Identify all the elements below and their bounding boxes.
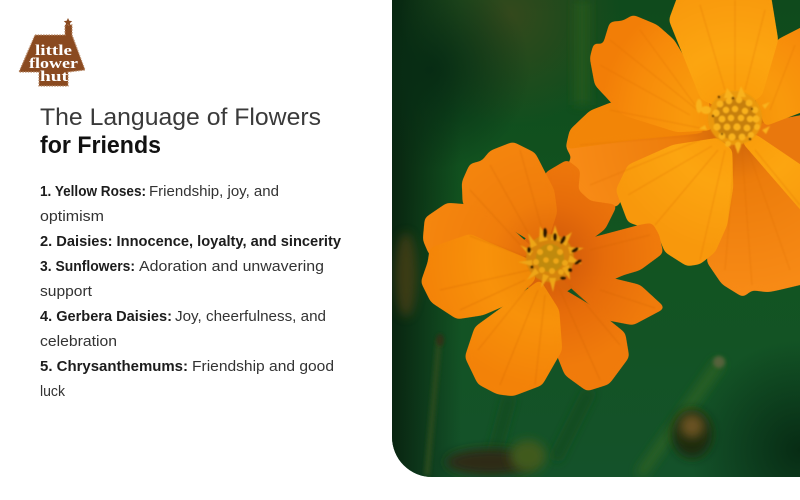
item 5: chrysanthemums (40, 359, 334, 400)
petal: upper left (590, 15, 712, 132)
item 3: sunflowers (40, 259, 324, 300)
item 1: yellow roses: Friendship, joy, and (149, 184, 279, 200)
petal: top right (546, 161, 616, 242)
petal: bottom right (707, 140, 800, 297)
item 3: sunflowers: 3. Sunflowers: (40, 259, 135, 275)
title (40, 104, 321, 159)
flower list (40, 184, 341, 400)
item 5: chrysanthemums: luck (40, 384, 66, 400)
petal: left lower (421, 234, 535, 319)
logo wordmark (29, 43, 78, 85)
item 3: sunflowers: Adoration and unwavering (139, 259, 324, 275)
blurred stems and buds (427, 334, 725, 475)
large flower (566, 0, 800, 297)
small flower (421, 142, 665, 396)
petal: bottom right (550, 291, 629, 390)
petal: top (462, 142, 557, 250)
petal: right upper (756, 28, 800, 125)
petal: right (580, 224, 662, 279)
item 1: yellow roses: optimism (40, 209, 104, 225)
photo: orange cosmos flowers (392, 0, 800, 477)
flower centre (518, 225, 584, 292)
title: for Friends (40, 132, 161, 159)
petal: top (669, 0, 778, 115)
item 2: daisies: 2. Daisies: Innocence, loyalty, and sincerity (40, 234, 341, 250)
petal: front lower (616, 138, 733, 266)
item 4: gerbera daisies: Joy, cheerfulness, and (175, 309, 326, 325)
blurred green background (392, 0, 800, 477)
logo wordmark: flower (29, 56, 78, 72)
petal veins (626, 11, 800, 220)
petal: right lower front (744, 135, 800, 209)
item 4: gerbera daisies: celebration (40, 334, 117, 350)
icon: house shape with chimney (19, 18, 85, 86)
flower centre (696, 86, 770, 154)
petal veins (481, 240, 585, 302)
item 1: yellow roses: 1. Yellow Roses: (40, 184, 146, 200)
item 5: chrysanthemums: 5. Chrysanthemums: (40, 359, 188, 375)
logo wordmark: little (35, 43, 72, 59)
petal: upper left (423, 203, 530, 256)
item 3: sunflowers: support (40, 284, 92, 300)
item 1: yellow roses (40, 184, 279, 225)
item 4: gerbera daisies (40, 309, 326, 350)
item 4: gerbera daisies: 4. Gerbera Daisies: (40, 309, 172, 325)
logo: little flower hut (19, 18, 85, 86)
petal: base fill behind centre (709, 100, 764, 152)
logo wordmark: hut (40, 69, 68, 85)
petal: bottom left (465, 280, 562, 396)
petal: right lower back (756, 115, 800, 164)
title: The Language of Flowers (40, 104, 321, 131)
petal: left upper lobe (566, 102, 712, 149)
item 5: chrysanthemums: Friendship and good (192, 359, 334, 375)
petal: right lower (571, 278, 663, 325)
petal: left (566, 102, 700, 206)
petal: base fill behind centre (523, 238, 572, 294)
